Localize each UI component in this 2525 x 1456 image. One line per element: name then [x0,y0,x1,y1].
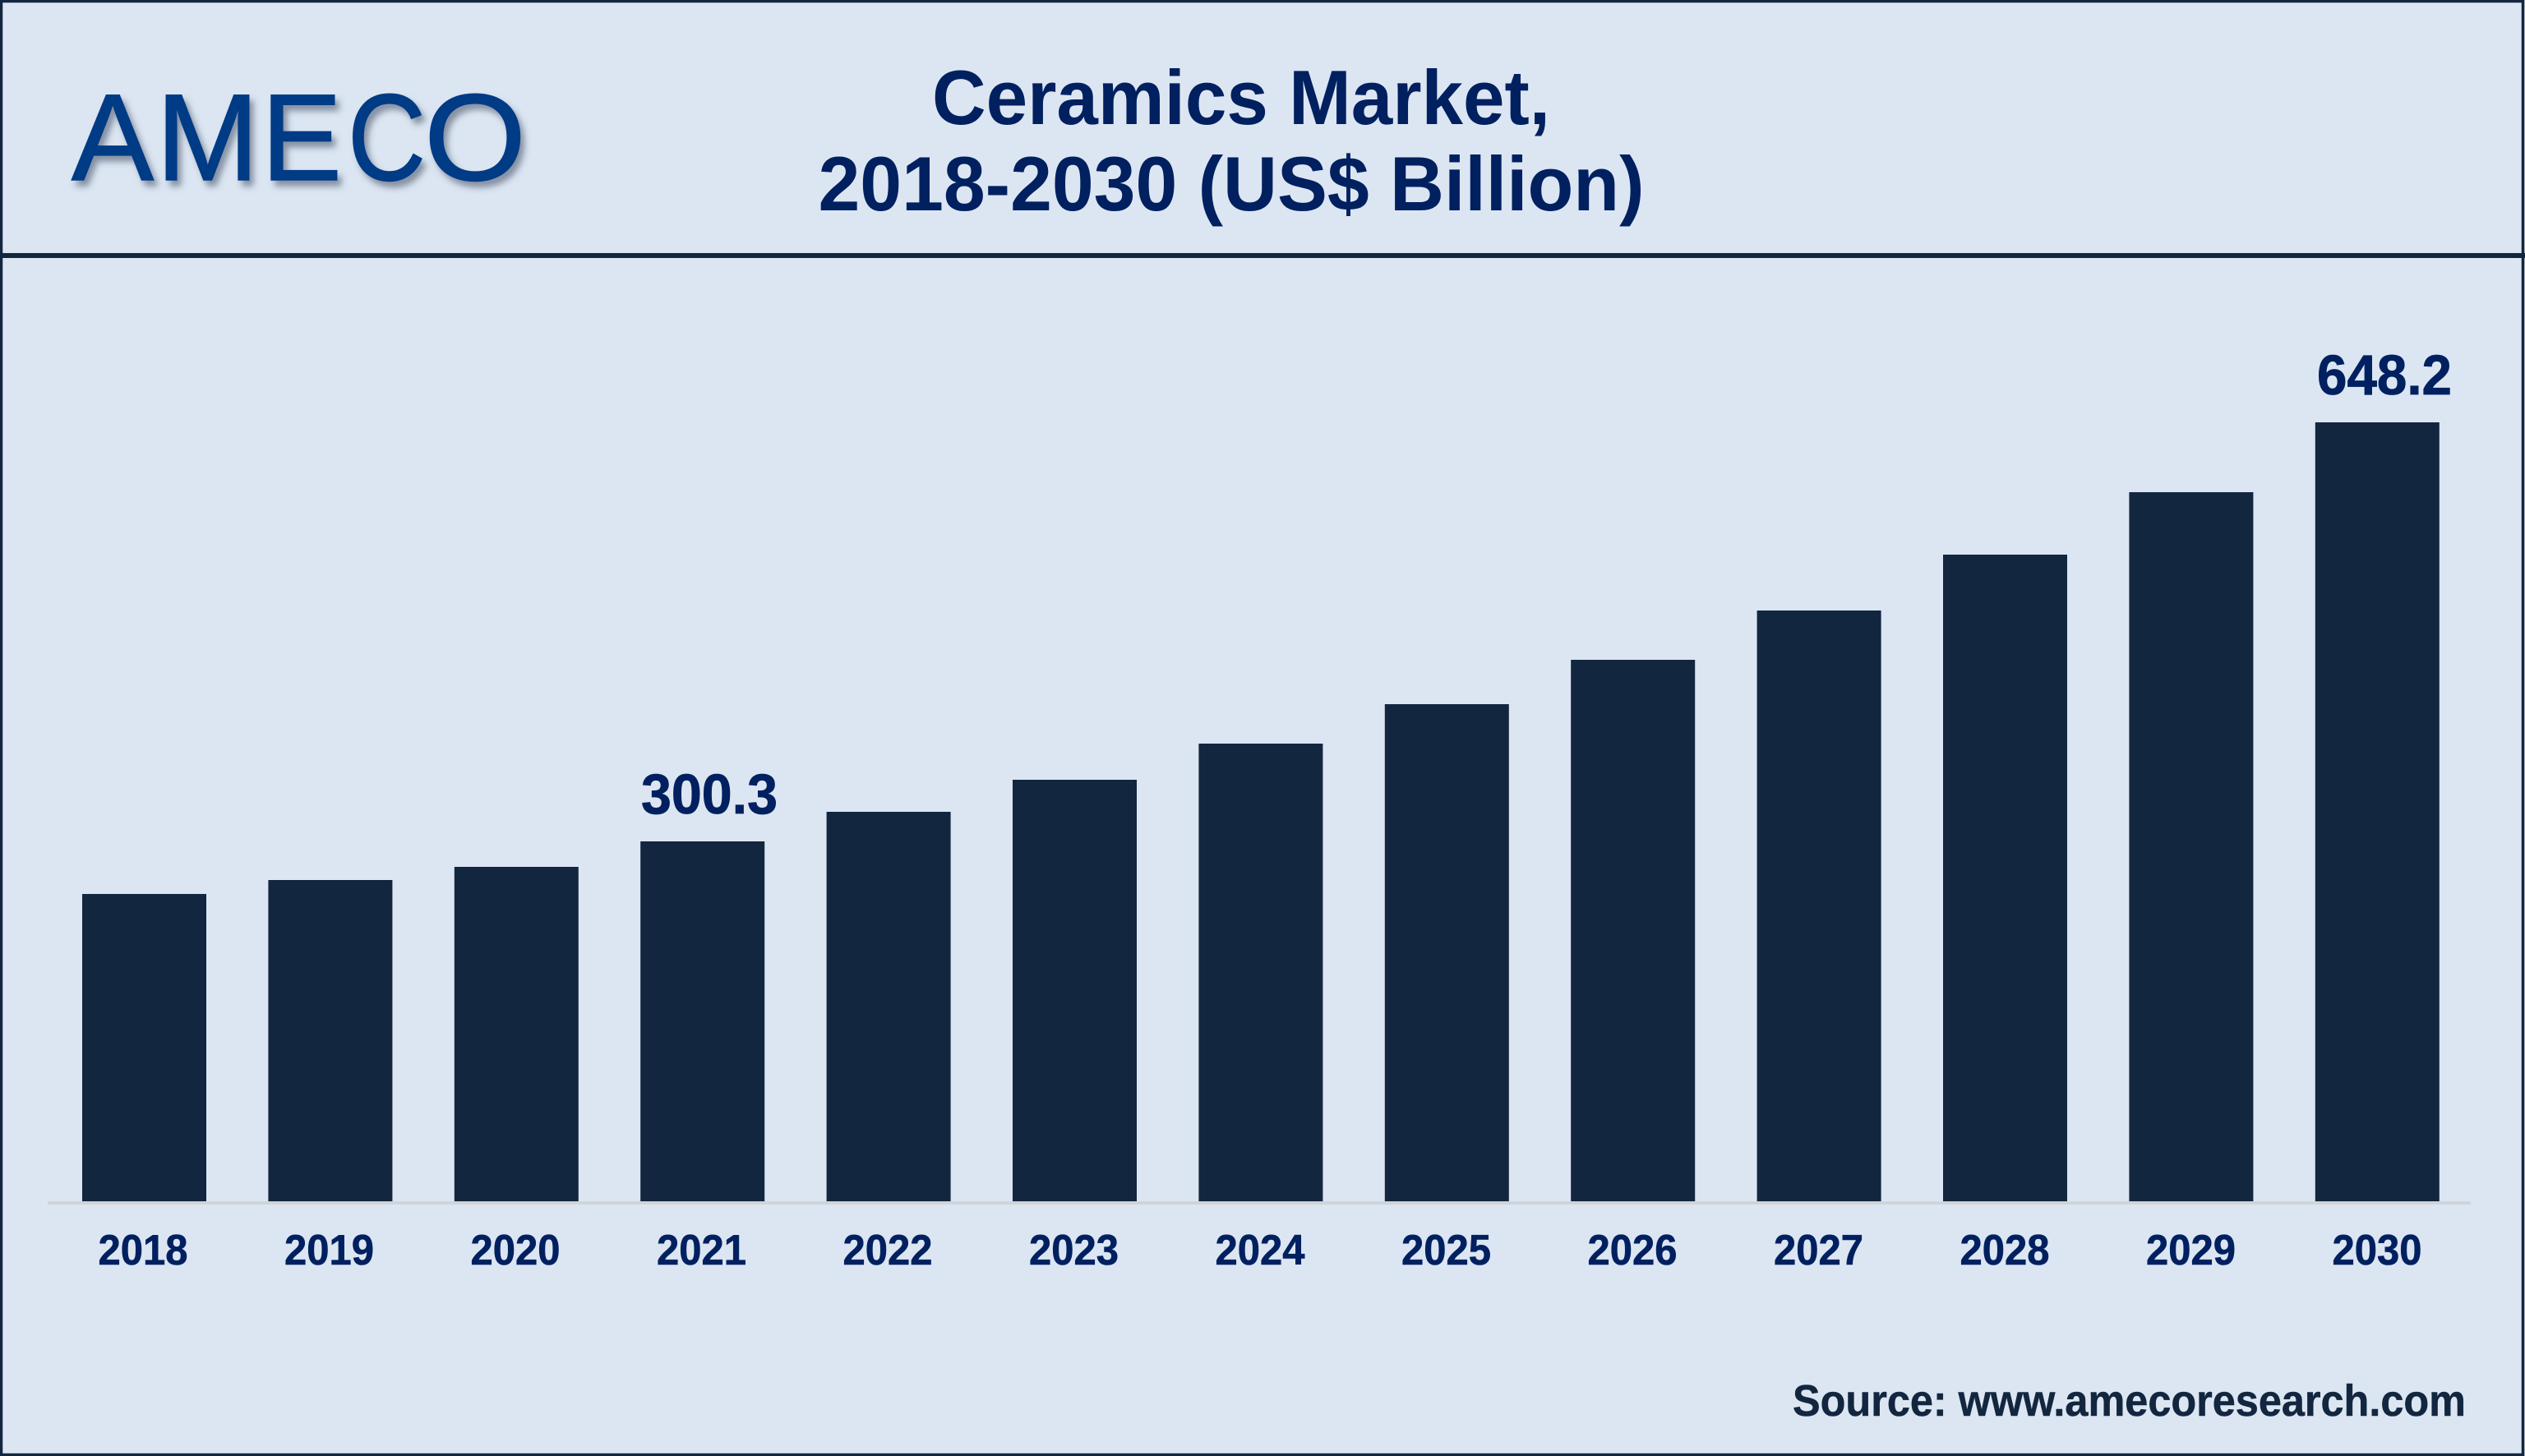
year labels [99,1227,2421,1274]
year labels: 2023 [1029,1227,1119,1274]
year labels: 2026 [1588,1227,1677,1274]
value label 2021: 300.3 [641,763,778,826]
logo: AMECO: E [261,68,342,206]
header divider [0,253,2525,258]
year labels: 2027 [1774,1227,1863,1274]
logo: AMECO: C [348,68,426,206]
year labels: 2020 [470,1227,561,1274]
bars [82,422,2440,1201]
year labels: 2028 [1960,1227,2050,1274]
logo: AMECO: O [424,68,526,206]
title: Ceramics Market, [932,54,1550,141]
year labels: 2022 [843,1227,932,1274]
title [819,54,1644,227]
logo: AMECO: A [72,68,154,206]
bar chart [48,343,2471,1274]
year labels: 2024 [1215,1227,1305,1274]
source: Source: www.amecoresearch.com [1793,1376,2466,1426]
year labels: 2030 [2333,1227,2421,1274]
year labels: 2025 [1401,1227,1491,1274]
value label 2030: 648.2 [2317,343,2452,407]
logo: AMECO: M [156,68,259,206]
title: 2018-2030 (US$ Billion) [819,141,1644,227]
x axis line [48,1201,2471,1205]
year labels: 2018 [99,1227,187,1274]
year labels: 2019 [284,1227,374,1274]
year labels: 2029 [2146,1227,2236,1274]
year labels: 2021 [657,1227,746,1274]
logo: AMECO [72,68,526,206]
